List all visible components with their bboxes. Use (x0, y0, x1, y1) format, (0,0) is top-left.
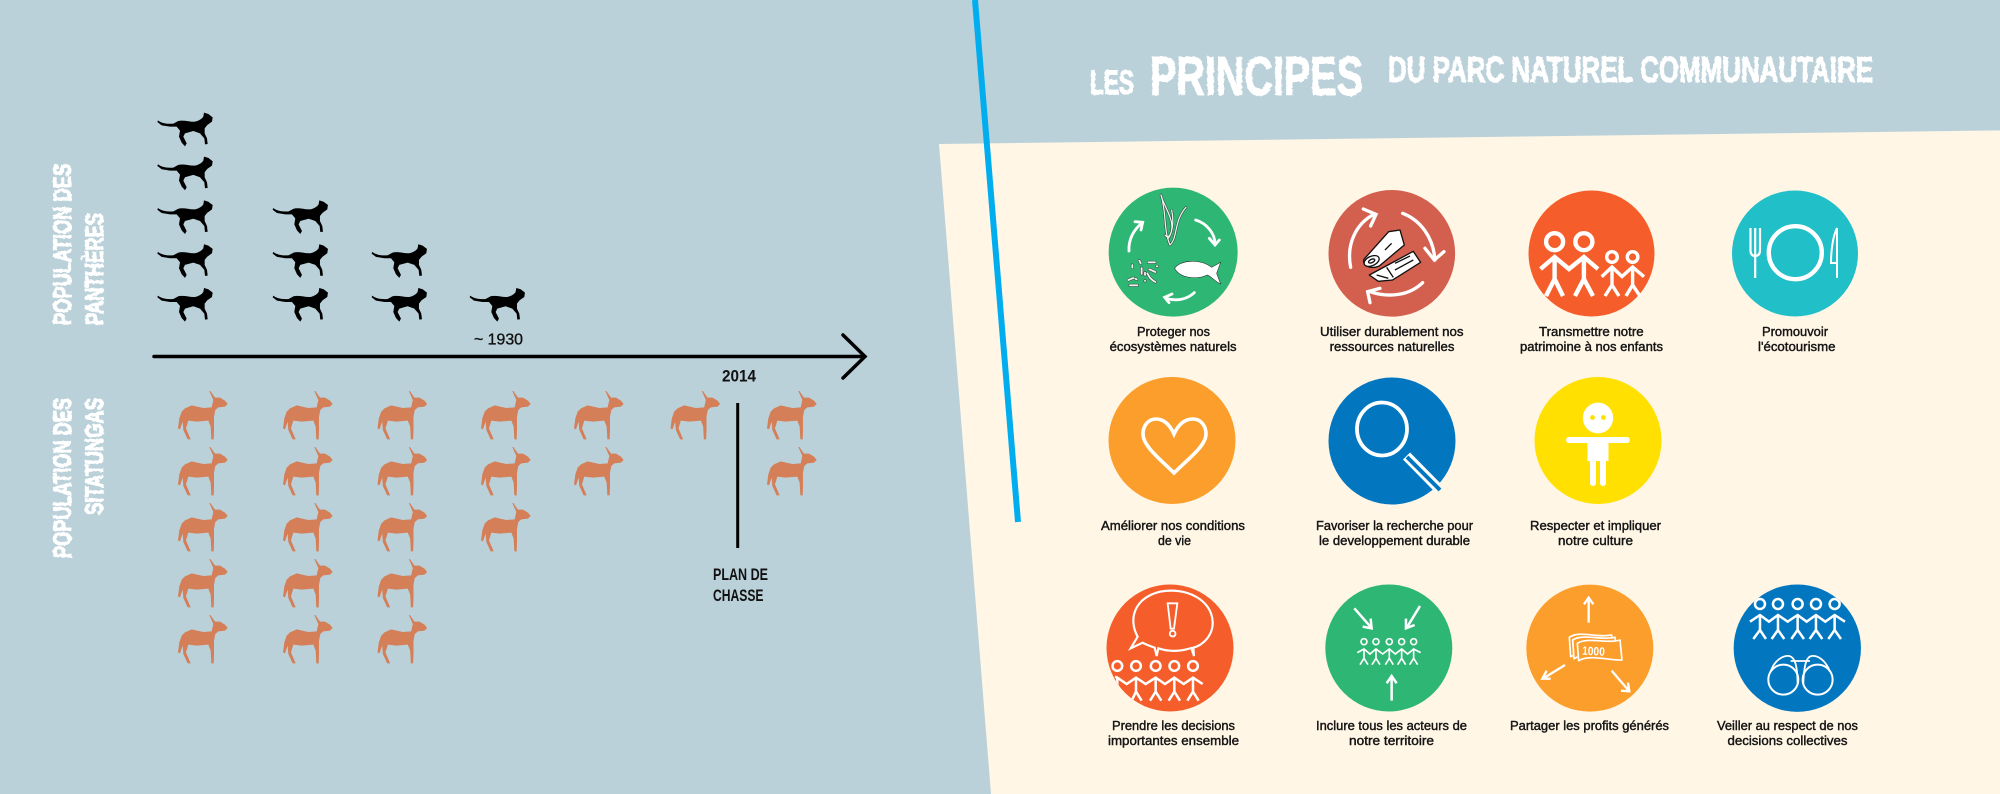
panther column 1 (157, 113, 213, 322)
icon: money and arrows: 1000 (1582, 644, 1605, 659)
label: culture: Respecter et impliquer (1530, 518, 1662, 533)
label: ~ 1930: ~ 1930 (474, 332, 523, 348)
plan de chasse marker line (736, 403, 739, 548)
icon: person culture (1534, 377, 1662, 504)
sitatunga column 7 (767, 391, 817, 495)
label: écotourisme (1758, 324, 1836, 354)
timeline arrow (154, 335, 865, 378)
label: acteurs (1316, 718, 1467, 748)
label: transmettre (1520, 324, 1663, 354)
label: recherche: le developpement durable (1319, 533, 1470, 548)
heading: vertical label sitatungas: SITATUNGAS (81, 398, 109, 515)
sitatunga column 4 (481, 391, 531, 551)
label: écotourisme: Promouvoir (1762, 324, 1829, 339)
recycling arrows (1350, 209, 1444, 303)
label: acteurs: Inclure tous les acteurs de (1316, 718, 1467, 733)
panel: principes cream background (939, 130, 2000, 794)
heading: vertical label panthères: POPULATION DES (49, 164, 77, 325)
label: protéger (1110, 324, 1237, 354)
icon: money and arrows (1526, 585, 1653, 712)
sitatunga column 6 (670, 391, 720, 439)
icon: speech bubble and group (1106, 584, 1233, 711)
title: PRINCIPES (1150, 45, 1363, 107)
particles (1128, 261, 1157, 285)
label: ressources: Utiliser durablement nos (1320, 324, 1464, 339)
label: ressources (1320, 324, 1464, 354)
heading: vertical label panthères (49, 164, 109, 325)
label: veiller (1717, 718, 1858, 748)
label: transmettre: patrimoine à nos enfants (1520, 339, 1663, 354)
label: plan de chasse: CHASSE (713, 587, 764, 605)
label: protéger: écosystèmes naturels (1110, 339, 1237, 354)
sitatunga column 5 (574, 391, 624, 495)
icon: écotourisme (1732, 190, 1858, 316)
icon: heart (1108, 377, 1236, 504)
fish (1175, 261, 1221, 284)
label: recherche: Favoriser la recherche pour (1316, 518, 1474, 533)
label: recherche (1316, 518, 1474, 548)
label: protéger: Proteger nos (1137, 324, 1210, 339)
icon: transmettre le patrimoine (1528, 190, 1654, 316)
icon: magnifying glass (1328, 378, 1456, 504)
panther column 4 (470, 288, 525, 322)
label: conditions de vie: Améliorer nos conditions (1101, 518, 1245, 533)
blue divider line (975, 0, 1018, 522)
logs (1362, 230, 1421, 281)
label: décisions: Prendre les decisions (1112, 718, 1235, 733)
panther column 3 (372, 244, 427, 322)
label: conditions de vie (1101, 518, 1245, 548)
label: veiller: Veiller au respect de nos (1717, 718, 1858, 733)
sitatunga column 2 (283, 391, 333, 663)
heading: vertical label sitatungas (49, 398, 109, 558)
label: transmettre: Transmettre notre (1539, 324, 1644, 339)
label: plan de chasse: PLAN DE (713, 566, 768, 584)
label: écotourisme: l'écotourisme (1758, 339, 1836, 354)
sitatunga column 1 (178, 391, 228, 663)
heading: vertical label panthères: PANTHÈRES (80, 213, 109, 325)
icon: protéger les écosystèmes (1109, 188, 1238, 317)
label: veiller: decisions collectives (1728, 733, 1848, 748)
label: conditions de vie: de vie (1158, 533, 1191, 548)
heading: vertical label sitatungas: POPULATION DES (49, 398, 77, 558)
label: profits: Partager les profits générés (1510, 718, 1669, 733)
seaweed (1161, 195, 1186, 245)
cycle arrows (1129, 220, 1219, 303)
icon: arrows to group (1325, 584, 1452, 711)
label: décisions (1108, 718, 1239, 748)
label: culture (1530, 518, 1662, 548)
label: ressources: ressources naturelles (1330, 339, 1455, 354)
label: acteurs: notre territoire (1349, 733, 1434, 748)
title (1090, 45, 1873, 107)
label: 2014: 2014 (722, 368, 757, 386)
icon: group and binoculars (1734, 584, 1861, 712)
label: décisions: importantes ensemble (1108, 733, 1239, 748)
icon: ressources naturelles (1328, 190, 1455, 317)
panther column 2 (273, 200, 328, 322)
sitatunga column 3 (377, 391, 427, 663)
label: culture: notre culture (1558, 533, 1633, 548)
label: plan de chasse (713, 566, 768, 605)
title: LES (1090, 64, 1134, 102)
